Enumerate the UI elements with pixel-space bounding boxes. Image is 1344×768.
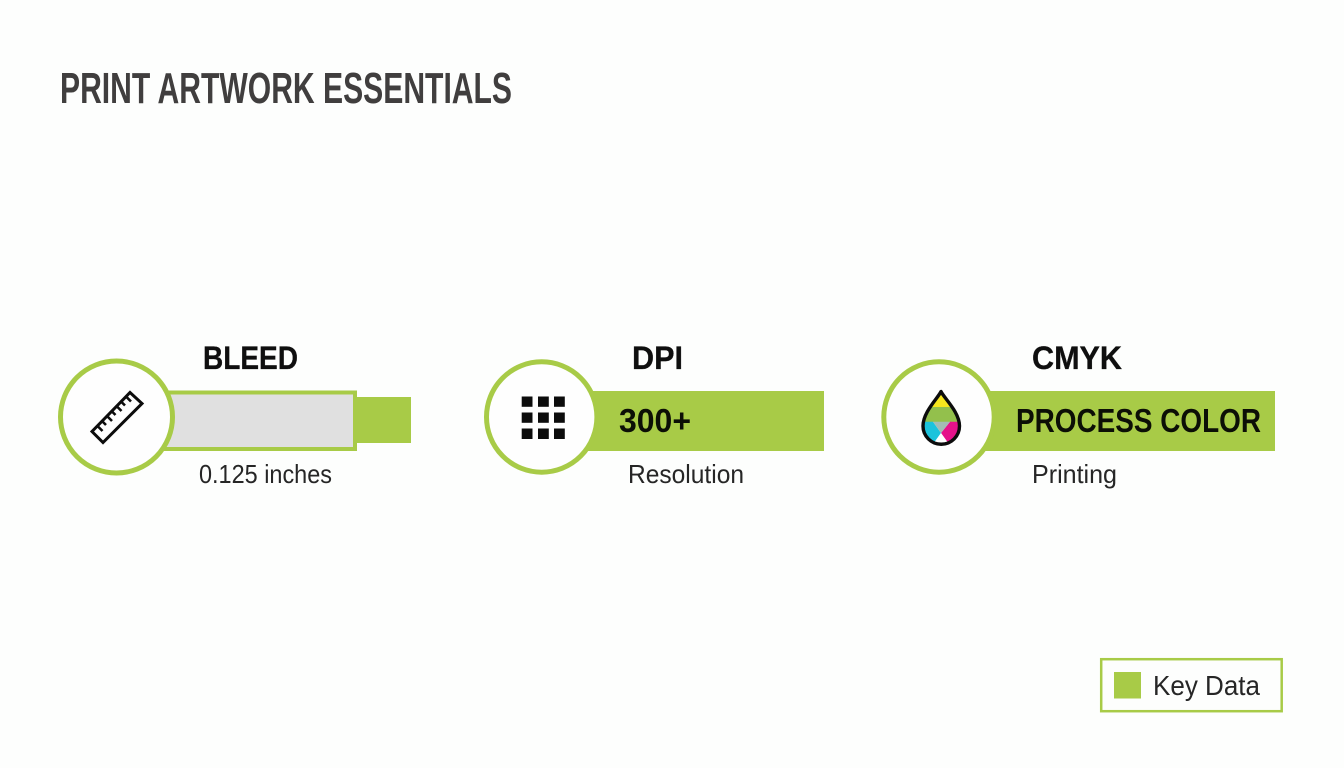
icon: ruler bbox=[92, 392, 142, 442]
title: PRINT ARTWORK ESSENTIALS bbox=[60, 64, 512, 113]
dpi value bar bbox=[580, 391, 824, 451]
caption: printing: Printing bbox=[1032, 459, 1117, 489]
value: bleed size: 0.125 inches bbox=[199, 459, 332, 489]
legend swatch bbox=[1114, 672, 1141, 698]
icon: ink drop bbox=[920, 390, 963, 447]
heading: dpi: DPI bbox=[632, 340, 683, 376]
legend frame bbox=[1101, 659, 1282, 711]
icon circle: cmyk bbox=[884, 362, 994, 472]
panel: bleed bbox=[60, 340, 411, 489]
caption: resolution: Resolution bbox=[628, 459, 744, 489]
drop outline bbox=[923, 392, 960, 444]
cmyk value bar bbox=[980, 391, 1275, 451]
icon: pixel grid bbox=[522, 396, 565, 439]
heading: bleed: BLEED bbox=[203, 340, 298, 376]
infographic canvas bbox=[58, 72, 1283, 712]
legend label: Key Data bbox=[1153, 670, 1260, 701]
legend bbox=[1101, 659, 1282, 711]
icon circle: dpi bbox=[486, 362, 597, 472]
panel: dpi bbox=[486, 340, 824, 489]
value: 300+: 300+ bbox=[619, 402, 691, 439]
bleed extension bar bbox=[355, 397, 411, 443]
icon circle: bleed bbox=[60, 361, 172, 473]
drop colour segments bbox=[924, 394, 958, 442]
heading: cmyk: CMYK bbox=[1032, 340, 1122, 376]
value: process color: PROCESS COLOR bbox=[1016, 402, 1261, 439]
artwork bar with outline bbox=[150, 392, 355, 449]
panel: cmyk bbox=[884, 340, 1275, 489]
